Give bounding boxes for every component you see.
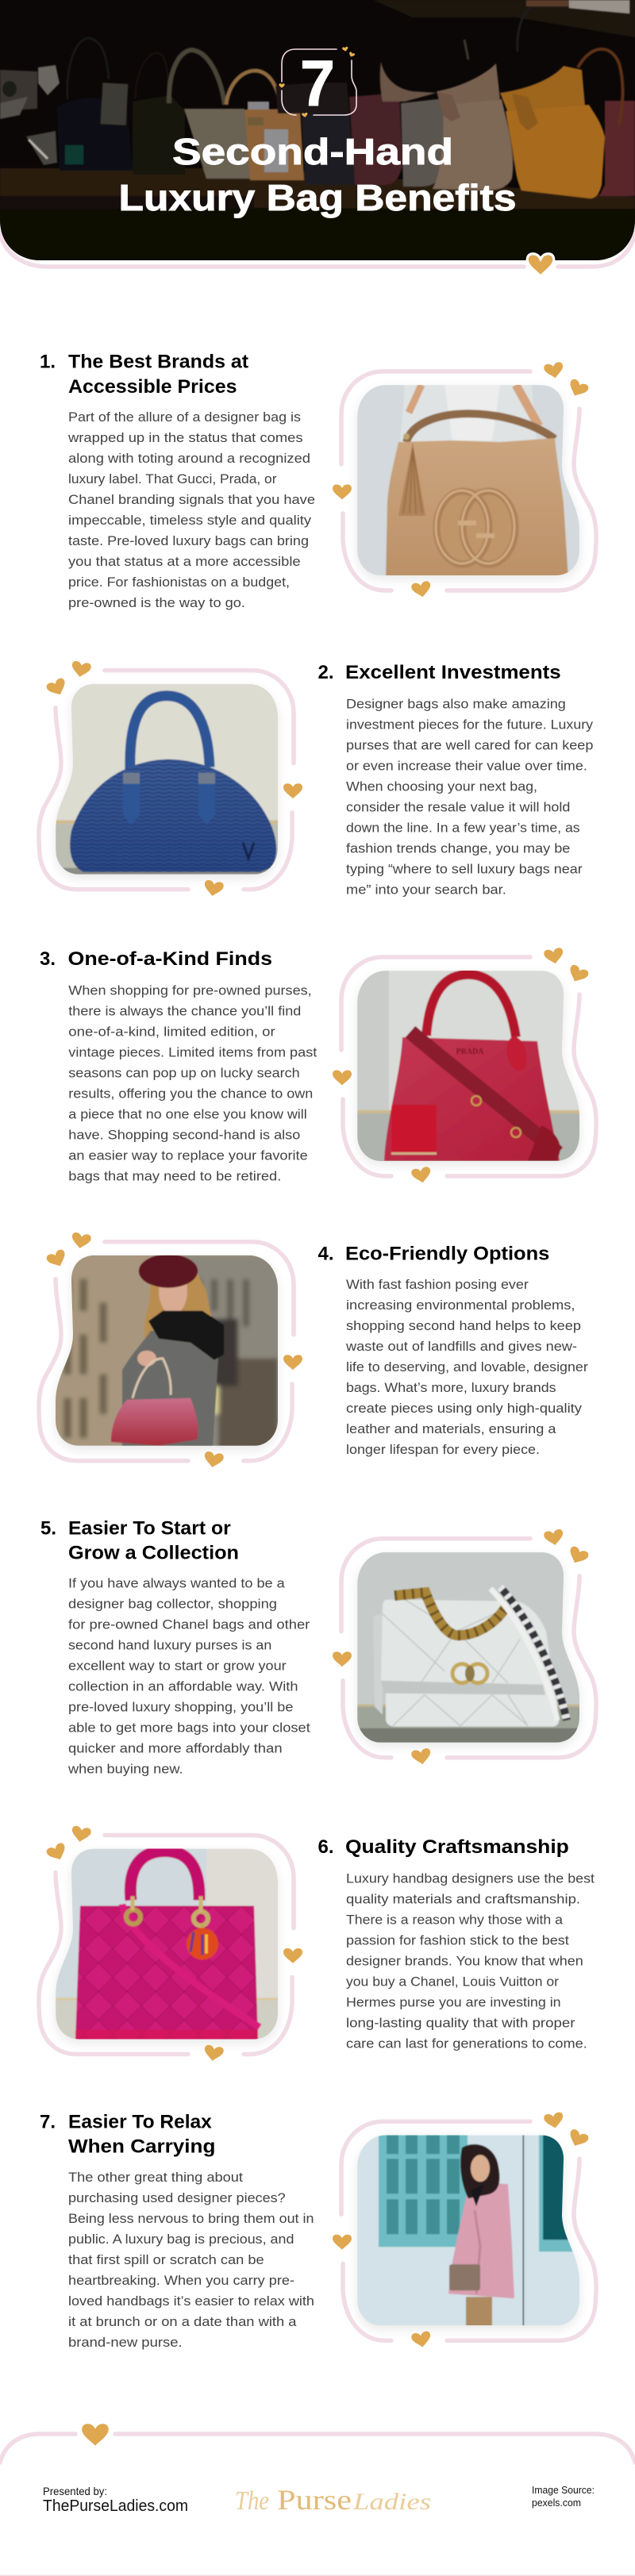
body text 4 (345, 1278, 588, 1457)
badge outline (282, 49, 356, 115)
body text 5: designer bag collector, shopping (68, 1598, 277, 1612)
heading 7: Easier To Relax (68, 2112, 212, 2133)
logo: The Purse Ladies: Purse (277, 2484, 352, 2516)
body text 5 (67, 1577, 310, 1777)
body text 1: pre-owned is the way to go. (68, 596, 245, 610)
body text 2: or even increase their value over time. (346, 759, 587, 773)
image source credit (532, 2484, 595, 2509)
photo: woman with pink bag (56, 1255, 286, 1454)
body text 5: collection in an affordable way. With (68, 1680, 298, 1694)
icon: header heart (527, 254, 554, 276)
heading 1 (40, 351, 248, 398)
body text 6: There is a reason why those with a (346, 1913, 564, 1927)
body text 1: along with toting around a recognized (68, 452, 310, 466)
body text 1: Chanel branding signals that you have (68, 493, 315, 507)
logo: The Purse Ladies: The (235, 2486, 269, 2516)
body text 7: loved handbags it’s easier to relax with (68, 2294, 314, 2309)
section 4: eco-friendly options (39, 1232, 588, 1469)
photo: white Chanel bag (357, 1552, 587, 1751)
heading 3: 3. (40, 948, 56, 970)
body text 4: create pieces using only high-quality (346, 1401, 583, 1416)
body text 7: that first spill or scratch can be (68, 2253, 264, 2267)
frame with hearts 2 (39, 660, 302, 898)
body text 3: When shopping for pre-owned purses, (68, 983, 312, 998)
heading 6: 6. (318, 1836, 334, 1858)
body text 1: wrapped up in the status that comes (67, 431, 303, 445)
body text 2: Designer bags also make amazing (346, 697, 566, 711)
section 1: best brands (40, 351, 596, 610)
heading 5: 5. (40, 1517, 56, 1539)
body text 5: when buying new. (67, 1763, 183, 1777)
body text 6: designer brands. You know that when (346, 1954, 583, 1968)
body text 7: Being less nervous to bring them out in (68, 2212, 314, 2226)
title: Second-Hand (172, 131, 453, 172)
body text 4: life to deserving, and lovable, designer (346, 1360, 588, 1375)
pink header outline (0, 233, 635, 267)
body text 3: a piece that no one else you know will (68, 1107, 307, 1121)
section 2: excellent investments (39, 660, 594, 898)
heading 5: Easier To Start or (68, 1517, 231, 1539)
presented by credit: ThePurseLadies.com (43, 2497, 188, 2515)
body text 7: heartbreaking. When you carry pre- (68, 2274, 294, 2288)
body text 6: long-lasting quality that with proper (346, 2016, 575, 2030)
body text 4: shopping second hand helps to keep (346, 1319, 581, 1333)
title: Luxury Bag Benefits (119, 177, 516, 218)
body text 3: bags that may need to be retired. (68, 1169, 281, 1183)
body text 1: luxury label. That Gucci, Prada, or (68, 472, 277, 486)
body text 5: second hand luxury purses is an (68, 1639, 271, 1653)
body text 6: care can last for generations to come. (346, 2036, 587, 2051)
image source credit: Image Source: (532, 2484, 595, 2496)
body text 7: purchasing used designer pieces? (68, 2191, 286, 2205)
body text 7: brand-new purse. (68, 2336, 183, 2350)
body text 6: you buy a Chanel, Louis Vuitton or (346, 1974, 560, 1989)
frame with hearts 7 (333, 2112, 596, 2349)
frame with hearts 3 (333, 948, 596, 1184)
body text 6: quality materials and craftsmanship. (346, 1892, 580, 1906)
frame with hearts 6 (39, 1825, 302, 2063)
body text 2: typing “where to sell luxury bags near (346, 862, 583, 876)
logo: The Purse Ladies: Ladies (352, 2489, 431, 2515)
body text 4: longer lifespan for every piece. (346, 1443, 540, 1457)
presented by credit (43, 2485, 188, 2515)
section 3: one-of-a-kind finds (40, 948, 596, 1184)
body text 6: Luxury handbag designers use the best (346, 1871, 595, 1886)
body text 3: seasons can pop up on lucky search (68, 1066, 300, 1080)
photo: red Prada bag: PRADA (456, 1048, 484, 1056)
body text 3: an easier way to replace your favorite (68, 1148, 308, 1163)
body text 5: for pre-owned Chanel bags and other (68, 1618, 310, 1632)
body text 2: down the line. In a few year’s time, as (346, 821, 580, 835)
heading 7 (40, 2112, 215, 2158)
heading 4: 4. (318, 1243, 334, 1264)
logo: The Purse Ladies (235, 2484, 431, 2516)
frame with hearts 4 (39, 1232, 302, 1469)
title (119, 131, 516, 218)
icon: footer heart (82, 2424, 109, 2446)
photo: red Prada bag (357, 971, 587, 1169)
image source credit: pexels.com (532, 2497, 581, 2509)
number seven badge (279, 47, 356, 120)
number seven: 7 (300, 48, 335, 120)
photo: blue Louis Vuitton bag (56, 684, 286, 882)
frame with hearts 1 (333, 362, 596, 598)
body text 4: With fast fashion posing ever (346, 1278, 529, 1292)
body text 2: fashion trends change, you may be (346, 841, 570, 855)
heading 5: Grow a Collection (68, 1542, 239, 1563)
body text 1 (67, 410, 315, 610)
body text 1: you that status at a more accessible (68, 555, 301, 569)
body text 7: public. A luxury bag is precious, and (68, 2232, 294, 2247)
footer (0, 2424, 635, 2516)
body text 2: purses that are well cared for can keep (346, 738, 593, 752)
body text 1: price. For fashionistas on a budget, (68, 575, 290, 590)
body text 4: increasing environmental problems, (346, 1298, 575, 1313)
body text 5: able to get more bags into your closet (68, 1721, 310, 1736)
heading 6: Quality Craftsmanship (345, 1836, 569, 1858)
section 7: easier to relax (40, 2112, 596, 2350)
body text 6 (346, 1871, 595, 2051)
presented by credit: Presented by: (43, 2485, 107, 2497)
body text 4: waste out of landfills and gives new- (345, 1340, 577, 1354)
heading 2: 2. (318, 662, 334, 683)
body text 4: bags. What’s more, luxury brands (346, 1381, 556, 1395)
pink footer outline (0, 2434, 635, 2463)
photo: tan Gucci bag (357, 385, 587, 583)
header banner (0, 0, 635, 267)
heading 7: 7. (40, 2112, 56, 2133)
header photo of bags on a shelf (0, 0, 635, 262)
badge hearts (279, 47, 355, 117)
photo: woman in pink coat (357, 2135, 587, 2333)
heading 1: 1. (40, 351, 56, 372)
body text 6: Hermes purse you are investing in (346, 1995, 561, 2009)
frame with hearts 5 (333, 1528, 596, 1766)
body text 5: quicker and more affordably than (68, 1742, 283, 1756)
body text 3: have. Shopping second-hand is also (68, 1128, 300, 1142)
body text 3: one-of-a-kind, limited edition, or (68, 1025, 275, 1039)
heading 4: Eco-Friendly Options (345, 1243, 549, 1264)
body text 7: it at brunch or on a date than with a (68, 2315, 297, 2329)
photo: pink Dior bag (56, 1849, 286, 2047)
body text 3: results, offering you the chance to own (68, 1086, 313, 1101)
body text 5: pre-loved luxury shopping, you’ll be (68, 1701, 293, 1715)
heading 1: Accessible Prices (68, 376, 237, 398)
body text 6: passion for fashion stick to the best (346, 1933, 569, 1947)
body text 2: When choosing your next bag, (346, 779, 537, 794)
body text 7: The other great thing about (68, 2170, 243, 2185)
body text 1: impeccable, timeless style and quality (68, 513, 312, 528)
heading 1: The Best Brands at (68, 351, 248, 372)
section 6: quality craftsmanship (39, 1825, 595, 2063)
body text 2: consider the resale value it will hold (346, 800, 570, 814)
body text 1: taste. Pre-loved luxury bags can bring (68, 534, 309, 548)
body text 7 (68, 2170, 314, 2350)
body text 1: Part of the allure of a designer bag is (68, 410, 301, 425)
body text 5: excellent way to start or grow your (68, 1659, 287, 1674)
heading 2: Excellent Investments (345, 662, 561, 683)
body text 5: If you have always wanted to be a (68, 1577, 286, 1591)
body text 3 (68, 983, 318, 1183)
heading 5 (40, 1517, 239, 1563)
body text 3: there is always the chance you’ll find (68, 1004, 301, 1018)
heading 3: One-of-a-Kind Finds (68, 948, 272, 970)
body text 3: vintage pieces. Limited items from past (68, 1045, 318, 1059)
body text 2: investment pieces for the future. Luxury (346, 717, 594, 732)
body text 2 (346, 697, 594, 897)
section 5: start or grow a collection (40, 1517, 596, 1777)
body text 4: leather and materials, ensuring a (346, 1422, 556, 1436)
heading 7: When Carrying (68, 2136, 215, 2158)
body text 2: me” into your search bar. (346, 882, 506, 897)
